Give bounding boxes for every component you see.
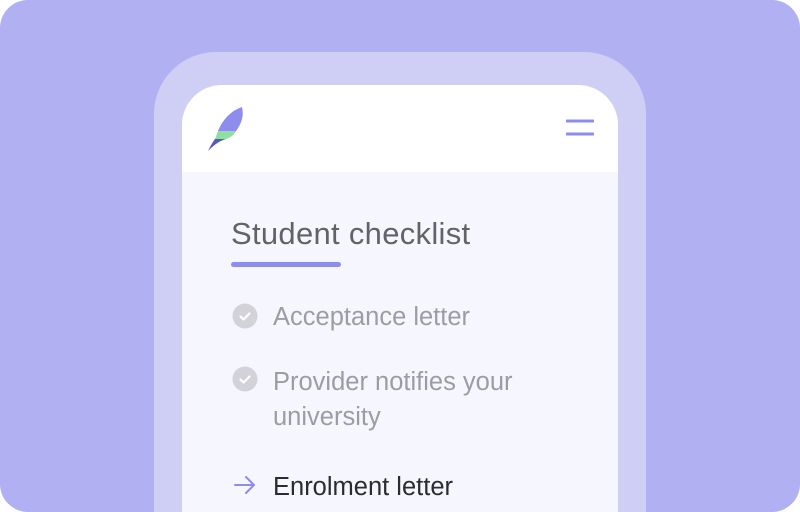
checklist item: provider notifies: university [273,403,381,431]
icon: check circle [232,304,258,328]
checklist item: enrolment letter (current): Enrolment letter [273,473,453,501]
icon: feather logo [208,107,243,151]
checklist item: provider notifies: Provider notifies your [273,368,513,396]
checklist item: acceptance letter: Acceptance letter [273,303,470,331]
title: Student checklist [231,216,470,251]
checklist item: provider notifies [232,366,513,431]
icon: arrow [234,476,255,494]
phone frame [154,52,646,512]
icon: check circle [232,366,258,392]
header bar [182,85,618,172]
phone screen [182,85,618,512]
title underline [231,262,341,267]
icon: hamburger menu [566,120,594,136]
